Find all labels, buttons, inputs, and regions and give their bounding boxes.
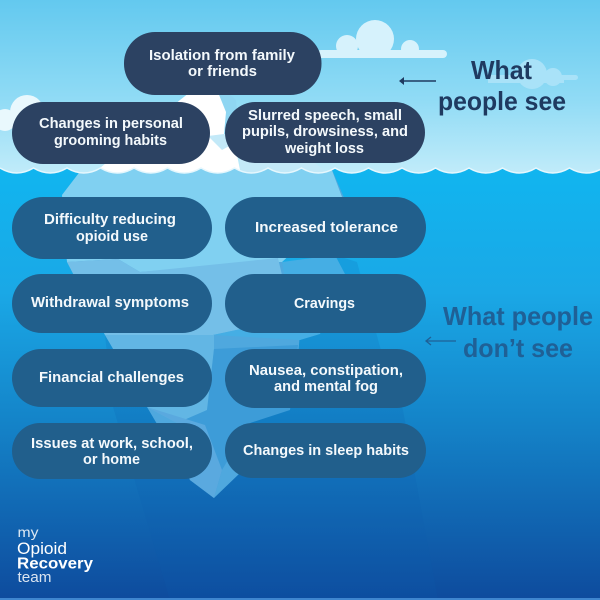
logo: Opioid bbox=[17, 540, 67, 558]
bottom edge bbox=[0, 598, 600, 600]
sky background bbox=[0, 0, 600, 180]
logo: my bbox=[18, 524, 38, 540]
heading: what people don't see bbox=[443, 301, 593, 363]
pill: increased tolerance: Increased tolerance bbox=[255, 220, 398, 236]
logo bbox=[17, 524, 93, 586]
wave line bbox=[0, 168, 600, 173]
arrow: what people see bbox=[399, 77, 436, 85]
iceberg below water bbox=[62, 168, 380, 498]
heading: what people don't see: What people bbox=[443, 301, 593, 331]
heading: what people don't see: don’t see bbox=[463, 333, 573, 363]
cloud: behind heading bbox=[488, 59, 578, 89]
pill: nausea bbox=[225, 349, 426, 408]
pill: cravings bbox=[225, 274, 426, 333]
pill: slurred speech: Slurred speech, small bbox=[248, 108, 402, 124]
pill: isolation bbox=[124, 32, 322, 95]
pill: difficulty reducing bbox=[12, 197, 212, 259]
pill: slurred speech bbox=[225, 102, 425, 163]
pill: withdrawal bbox=[12, 274, 212, 333]
pill: difficulty reducing: Difficulty reducing bbox=[44, 212, 176, 228]
arrow: what people don't see bbox=[426, 337, 456, 345]
pill: isolation: or friends bbox=[188, 64, 257, 80]
pill: sleep: Changes in sleep habits bbox=[243, 443, 409, 459]
pill: slurred speech: weight loss bbox=[284, 141, 364, 157]
pill: financial: Financial challenges bbox=[39, 370, 184, 386]
logo: Recovery bbox=[17, 556, 93, 572]
pill: cravings: Cravings bbox=[294, 296, 355, 312]
pill: withdrawal: Withdrawal symptoms bbox=[31, 295, 189, 311]
pill: nausea: Nausea, constipation, bbox=[249, 363, 403, 379]
water background bbox=[0, 160, 600, 600]
heading: what people see: people see bbox=[438, 86, 566, 116]
pill: issues: or home bbox=[83, 452, 140, 468]
heading: what people see: What bbox=[471, 55, 532, 85]
pill: issues: Issues at work, school, bbox=[31, 436, 193, 452]
heading: what people see bbox=[438, 55, 566, 116]
group: what people don't see bbox=[12, 197, 426, 479]
pill: grooming: Changes in personal bbox=[39, 116, 183, 132]
pill: slurred speech: pupils, drowsiness, and bbox=[242, 124, 408, 140]
pill: increased tolerance bbox=[225, 197, 426, 258]
iceberg above water bbox=[86, 75, 335, 180]
pill: nausea: and mental fog bbox=[274, 379, 378, 395]
logo: team bbox=[18, 570, 52, 586]
cloud: upper right bbox=[317, 20, 447, 58]
pill: financial bbox=[12, 349, 212, 407]
pill: issues bbox=[12, 423, 212, 479]
pill: grooming bbox=[12, 102, 210, 164]
pill: grooming: grooming habits bbox=[54, 133, 167, 149]
pill: isolation: Isolation from family bbox=[149, 48, 295, 64]
group: what people see bbox=[12, 32, 425, 164]
pill: difficulty reducing: opioid use bbox=[76, 229, 148, 245]
cloud: left bbox=[0, 95, 50, 131]
pill: sleep bbox=[225, 423, 426, 478]
